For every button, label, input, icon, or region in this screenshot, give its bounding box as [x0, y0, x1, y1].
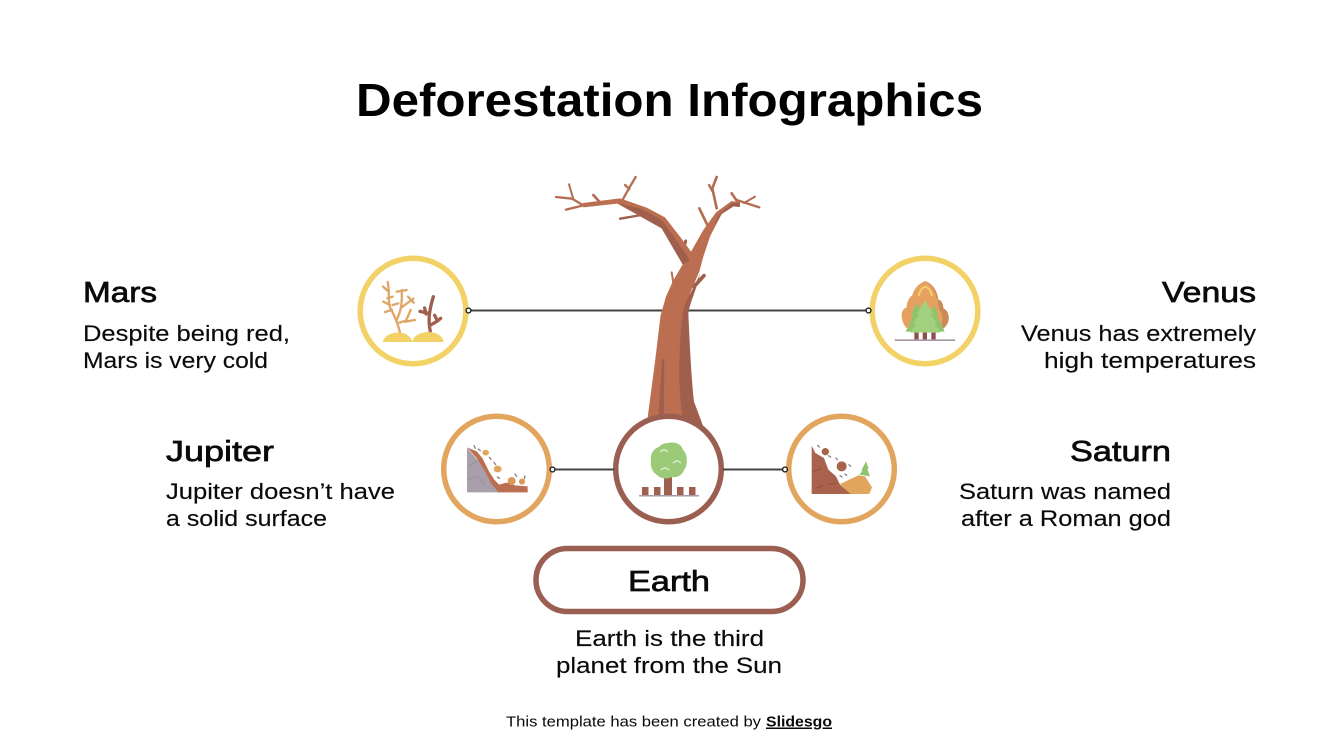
- text block: Jupiter: [166, 436, 395, 531]
- footer credit: Slidesgo: [766, 714, 832, 730]
- trunk shadow: [679, 273, 704, 428]
- footer credit: This template has been created by: [506, 714, 762, 730]
- description: Mars: [83, 321, 290, 373]
- heading: Jupiter: Jupiter: [166, 436, 274, 468]
- connector: Jupiter to Earth: [550, 467, 614, 472]
- text block: Saturn: [959, 436, 1171, 531]
- icon node: Saturn: [789, 416, 894, 522]
- description: Earth: planet from the Sun: [556, 653, 782, 678]
- text block: Mars: [83, 277, 290, 373]
- twigs: [556, 177, 759, 287]
- icon: tree with cut stumps: [639, 442, 699, 496]
- connector endpoints: Mars and Venus: [466, 308, 871, 313]
- description: Earth: Earth is the third: [575, 626, 764, 651]
- label pill: Earth: [536, 548, 803, 612]
- icon: dry coral and sand: [383, 282, 443, 342]
- icon: burning forest: [895, 281, 955, 341]
- connector: Earth to Saturn: [723, 467, 787, 472]
- description: Saturn: after a Roman god: [961, 506, 1171, 531]
- description: Saturn: Saturn was named: [959, 479, 1171, 504]
- icon node: Jupiter: [444, 416, 549, 522]
- description: Mars: Mars is very cold: [83, 348, 268, 373]
- heading: Mars: Mars: [83, 277, 157, 309]
- description: Venus: high temperatures: [1044, 348, 1256, 373]
- icon node: Mars: [360, 258, 466, 364]
- description: Mars: Despite being red,: [83, 321, 290, 346]
- title: Deforestation Infographics: [356, 74, 983, 126]
- icon: rockslide on grey cliff: [467, 446, 528, 492]
- connector: Mars to Venus: [469, 310, 868, 312]
- description: Venus: Venus has extremely: [1021, 321, 1256, 346]
- icon node: Venus: [872, 258, 978, 364]
- trunk groove: [658, 359, 664, 417]
- branch shadows: [617, 203, 690, 264]
- description: Jupiter: Jupiter doesn’t have: [166, 479, 395, 504]
- description: Saturn: [959, 479, 1171, 531]
- description: Jupiter: a solid surface: [166, 506, 327, 531]
- description: Venus: [1021, 321, 1256, 373]
- heading: Venus: Venus: [1162, 277, 1256, 309]
- description: Jupiter: [166, 479, 395, 531]
- text block: Venus: [1021, 277, 1256, 373]
- trunk and branches: [583, 198, 740, 420]
- heading: Saturn: Saturn: [1070, 436, 1171, 468]
- illustration: bare tree: [556, 177, 759, 428]
- label pill: Earth: Earth: [628, 566, 710, 598]
- description: Earth: [556, 626, 782, 678]
- icon: brown landslide with small tree: [812, 445, 872, 494]
- icon node: Earth: [616, 416, 721, 522]
